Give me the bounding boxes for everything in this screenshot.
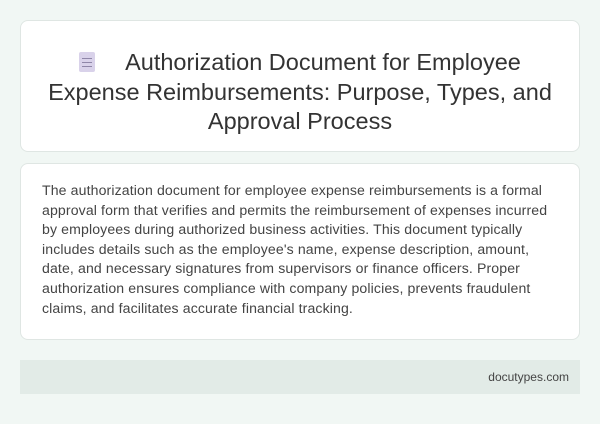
panel: description xyxy=(20,163,580,340)
panel: header xyxy=(20,20,580,152)
title: Authorization Document for Employee Expense Reimbursements: Purpose, Types, and Approval Process xyxy=(48,49,552,134)
footer xyxy=(20,360,580,394)
icon: document xyxy=(79,52,95,72)
text block: The authorization document for employee expense reimbursements is a formal approval form that verifies and permits the reimbursement of expenses incurred by employees during authorized business activities. This document typically includes details such as the employee's name, expense description, amount, date, and necessary signatures from supervisors or finance officers. Proper authorization ensures compliance with company policies, prevents fraudulent claims, and facilitates accurate financial tracking. xyxy=(42,182,547,316)
footer: docutypes.com xyxy=(488,370,569,384)
